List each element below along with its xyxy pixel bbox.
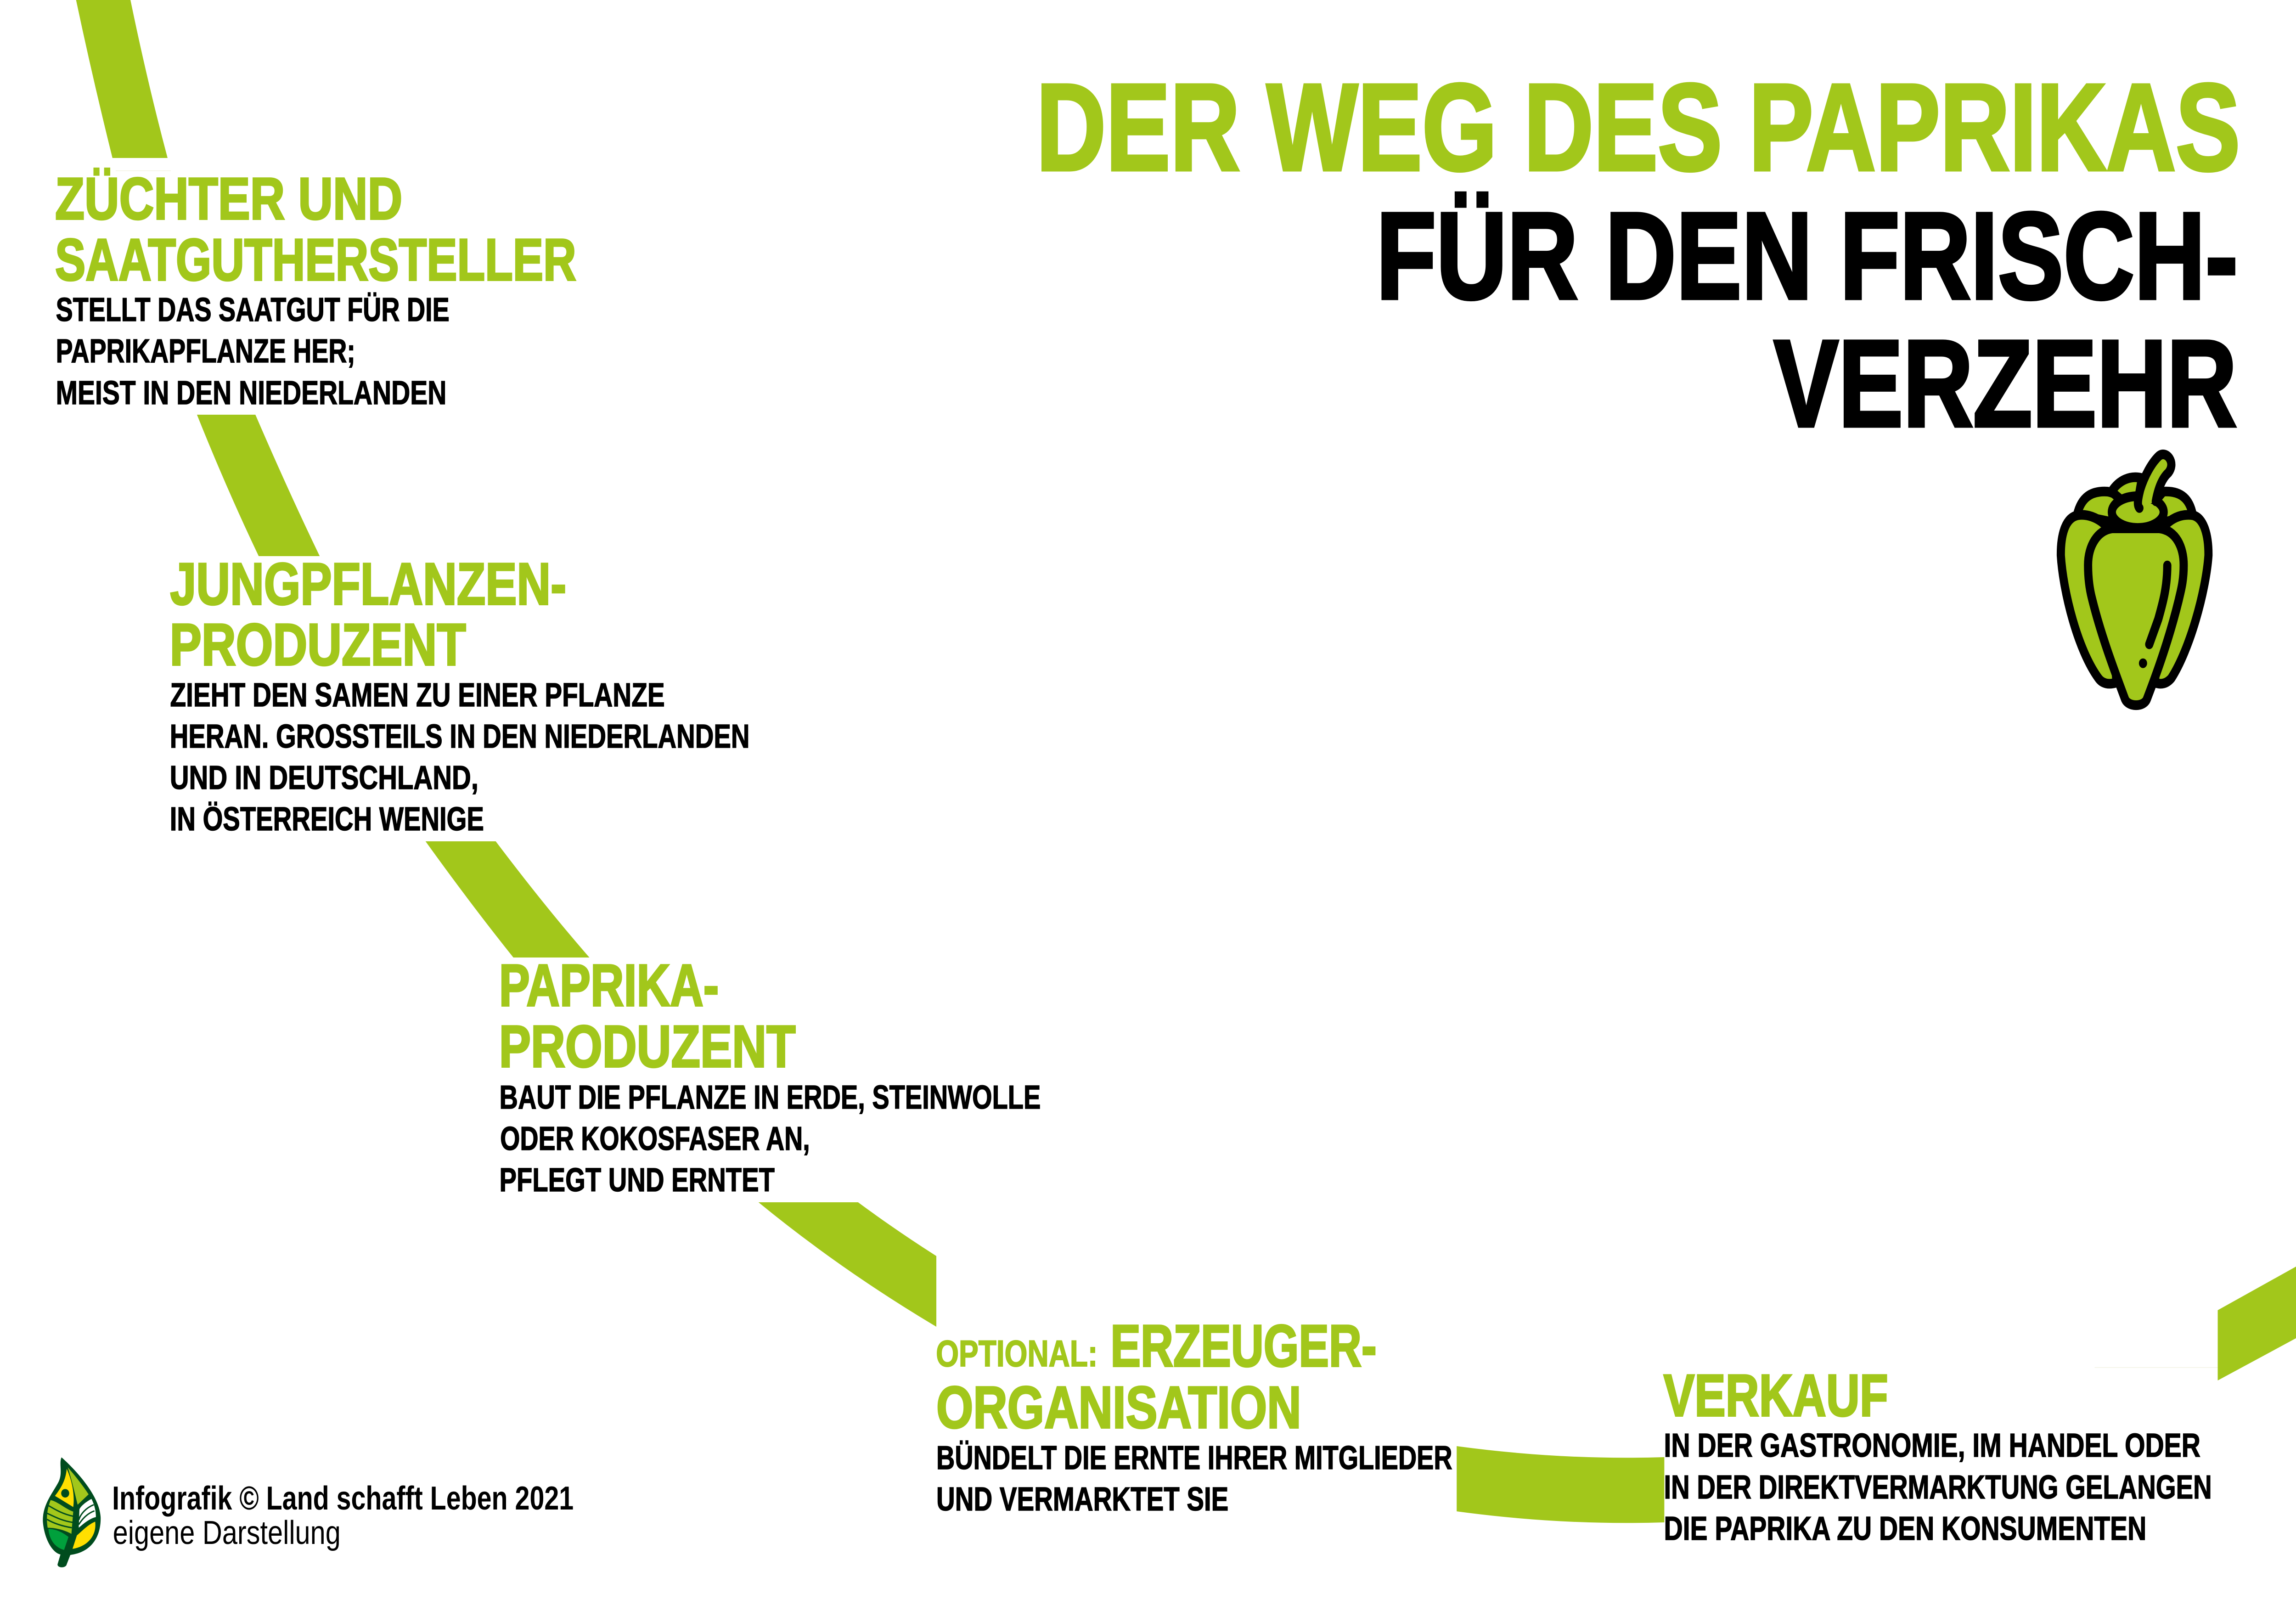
heading: OPTIONAL:: [936, 1333, 1097, 1374]
title: VERZEHR: [1774, 314, 2237, 452]
title: FÜR DEN FRISCH-: [1376, 186, 2238, 325]
heading: [499, 952, 796, 1080]
text block: STELLT DAS SAATGUT FÜR DIE: [56, 291, 450, 328]
text block: ODER KOKOSFASER AN,: [500, 1120, 810, 1157]
text block: IN DER GASTRONOMIE, IM HANDEL ODER: [1664, 1427, 2200, 1464]
icon: Land schafft Leben leaf logo: [43, 1457, 101, 1567]
text block: [936, 1439, 1452, 1517]
credit text: [112, 1480, 574, 1551]
icon: bell pepper: [2061, 454, 2208, 705]
text block: [170, 676, 750, 837]
text block: HERAN. GROSSTEILS IN DEN NIEDERLANDEN: [170, 718, 750, 755]
text block: DIE PAPRIKA ZU DEN KONSUMENTEN: [1664, 1510, 2146, 1547]
credit text: eigene Darstellung: [113, 1514, 341, 1551]
title: DER WEG DES PAPRIKAS: [1036, 58, 2240, 196]
text block: [56, 291, 450, 411]
heading: [936, 1312, 1377, 1441]
heading: SAATGUTHERSTELLER: [55, 226, 576, 293]
panel: Erzeugerorganisation: [936, 1312, 1452, 1517]
text block: BAUT DIE PFLANZE IN ERDE, STEINWOLLE: [500, 1079, 1041, 1115]
panel: Jungpflanzen-Produzent: [170, 551, 750, 837]
heading: PRODUZENT: [499, 1013, 796, 1080]
panel: Paprika-Produzent: [499, 952, 1041, 1198]
path segment 6: [2218, 1267, 2296, 1380]
path segment 2: [197, 415, 320, 556]
text block: [1664, 1427, 2212, 1547]
path segment 3: [426, 841, 590, 958]
text block: BÜNDELT DIE ERNTE IHRER MITGLIEDER: [936, 1439, 1452, 1476]
heading: PRODUZENT: [170, 611, 466, 678]
text block: UND VERMARKTET SIE: [936, 1481, 1228, 1517]
heading: VERKAUF: [1664, 1362, 1888, 1429]
text block: UND IN DEUTSCHLAND,: [170, 759, 478, 796]
text block: PAPRIKAPFLANZE HER;: [56, 332, 355, 369]
heading: [170, 551, 566, 678]
panel: Verkauf: [1664, 1362, 2212, 1547]
panel: Züchter und Saatguthersteller: [55, 165, 576, 411]
path segment 5: [1457, 1446, 1664, 1523]
heading: ERZEUGER-: [1110, 1312, 1377, 1379]
text block: MEIST IN DEN NIEDERLANDEN: [56, 374, 446, 411]
path segment 4: [759, 1202, 936, 1327]
heading: JUNGPFLANZEN-: [170, 551, 566, 617]
text block: PFLEGT UND ERNTET: [500, 1161, 775, 1198]
heading: ORGANISATION: [936, 1374, 1301, 1441]
heading: PAPRIKA-: [499, 952, 719, 1019]
credit text: Infografik © Land schafft Leben 2021: [112, 1480, 574, 1516]
text block: [500, 1079, 1041, 1198]
path segment 1: [76, 0, 168, 158]
title: [1036, 58, 2240, 452]
text block: IN DER DIREKTVERMARKTUNG GELANGEN: [1664, 1469, 2212, 1505]
text block: ZIEHT DEN SAMEN ZU EINER PFLANZE: [170, 676, 665, 713]
heading: ZÜCHTER UND: [55, 165, 402, 232]
text block: IN ÖSTERREICH WENIGE: [170, 800, 484, 837]
heading: [55, 165, 576, 293]
